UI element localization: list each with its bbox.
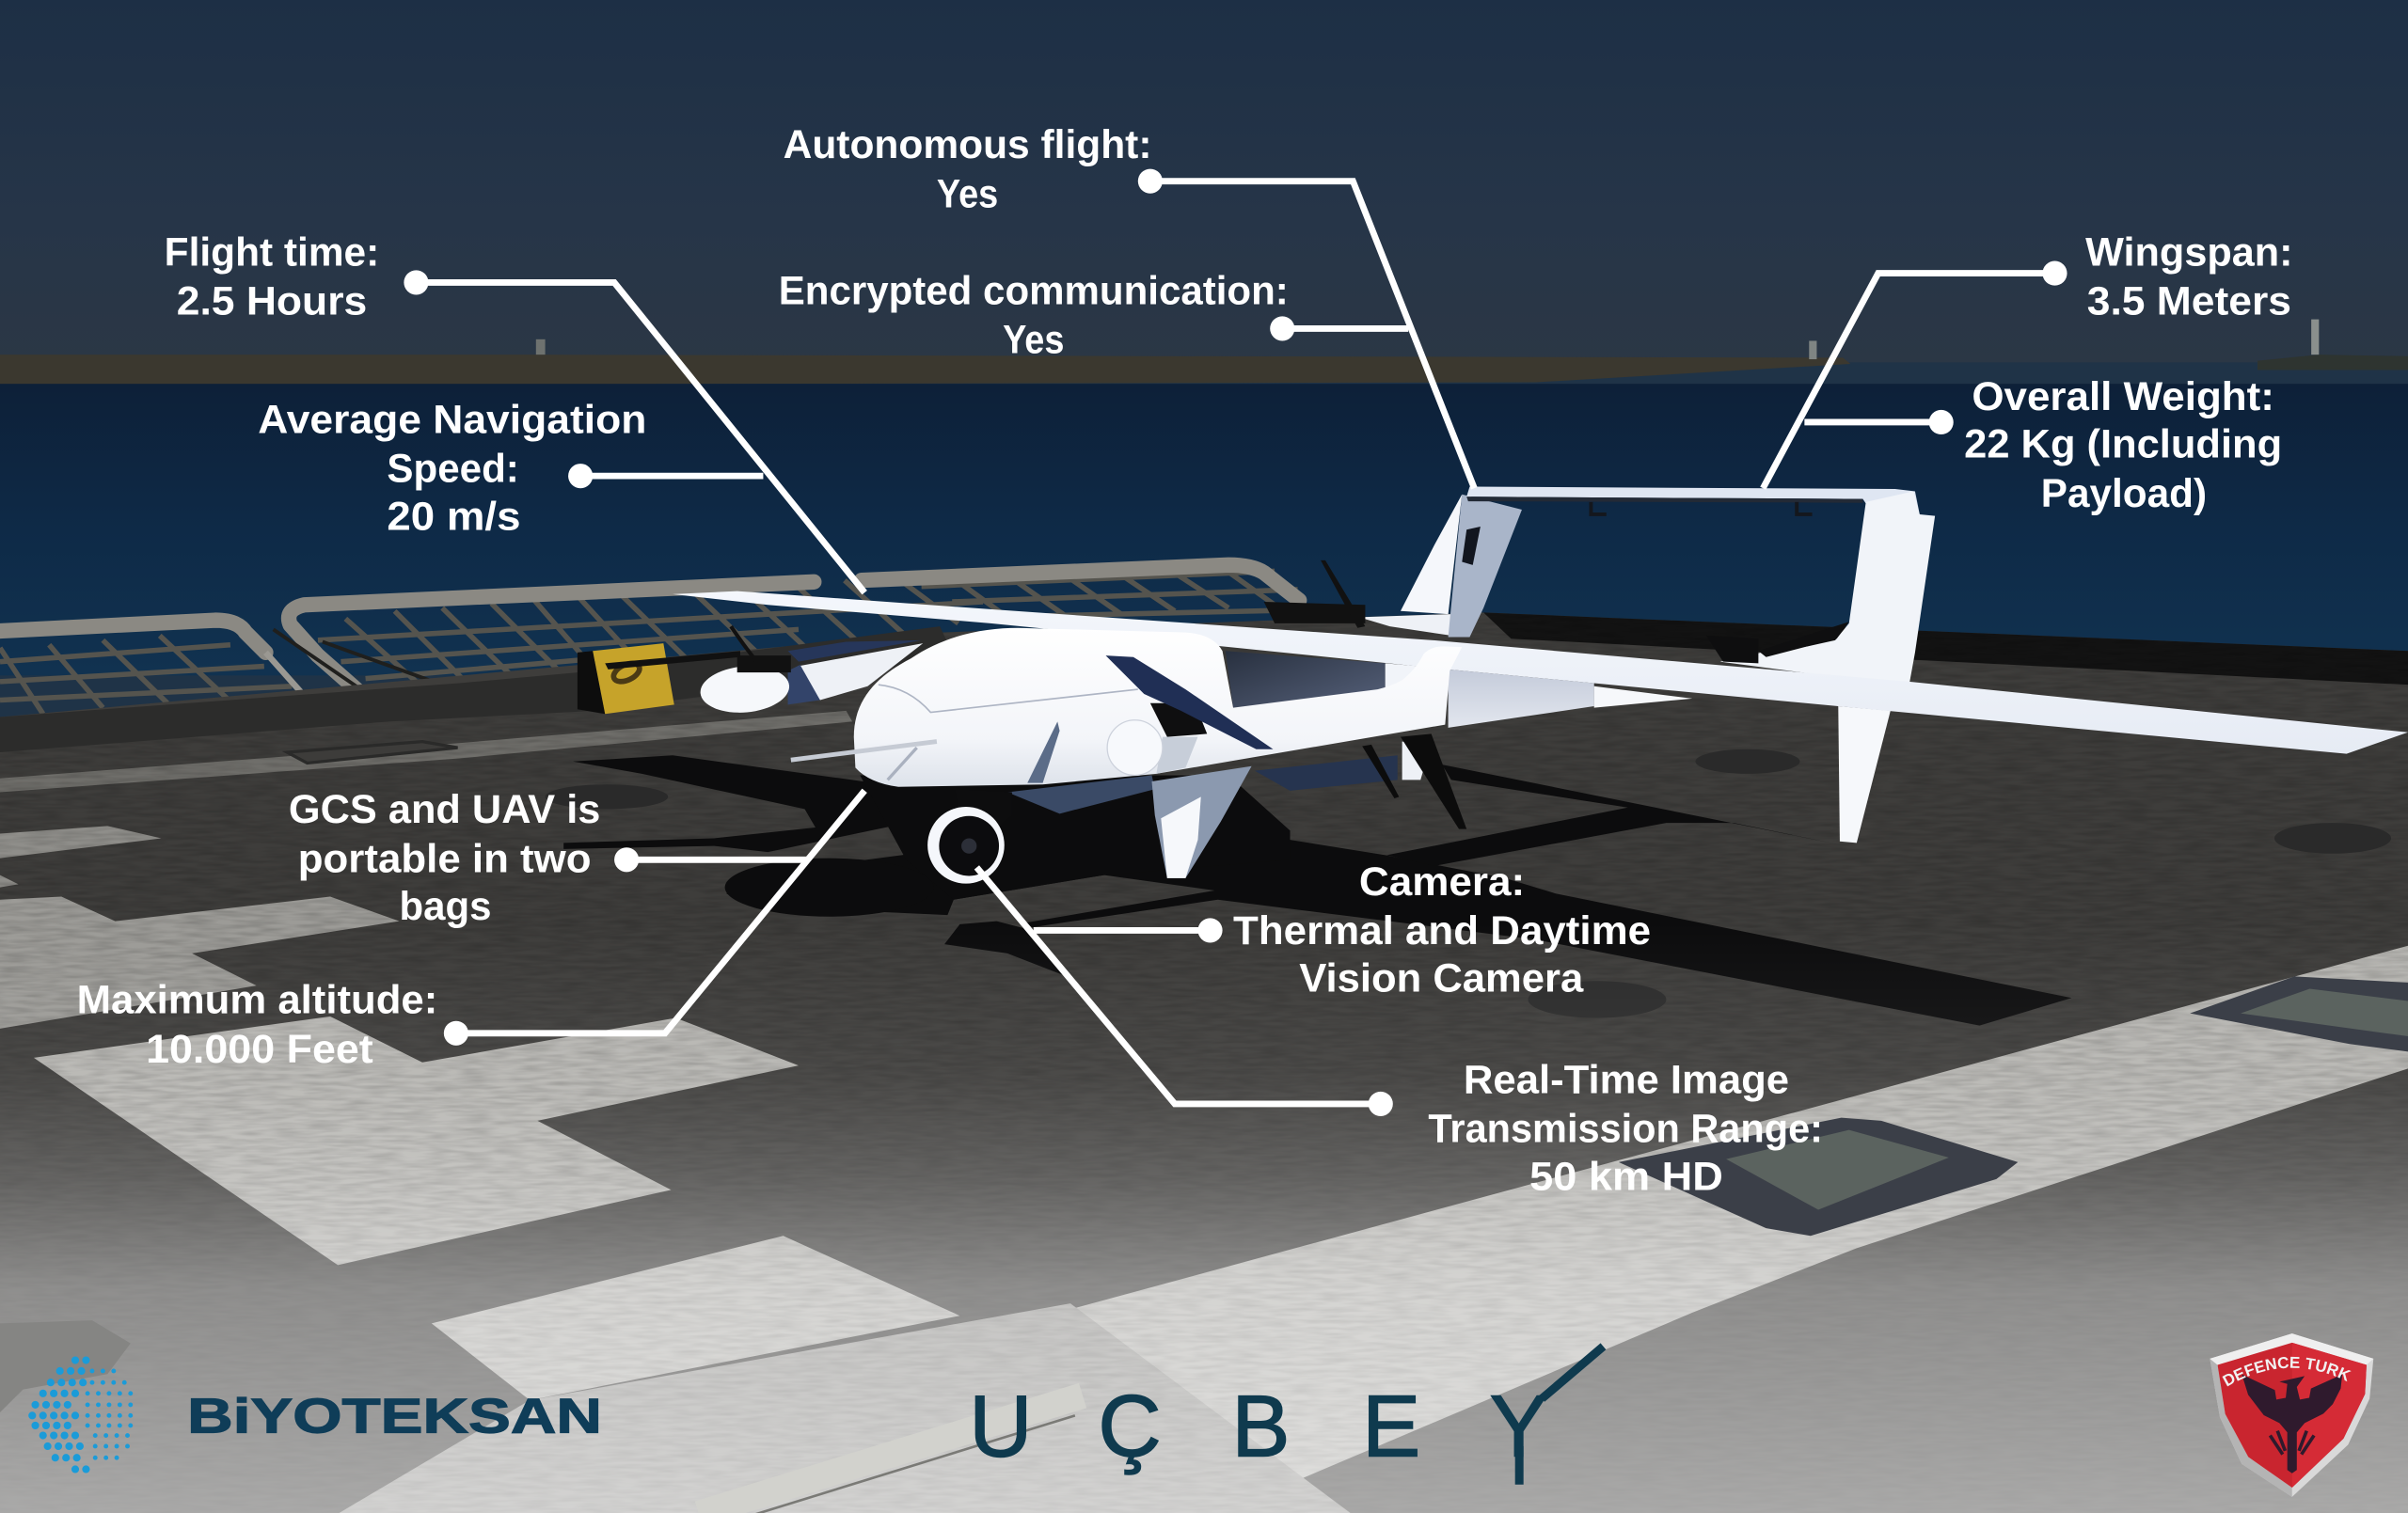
- breakwater on the horizon: [0, 320, 2408, 386]
- label: [258, 397, 646, 538]
- leader line: [976, 867, 1393, 1116]
- light fade over lower deck: [0, 922, 2408, 1513]
- callout: camera: [1034, 859, 1651, 1001]
- logo: UÇBEY: [969, 1347, 1603, 1485]
- label: GCS and UAV is: [289, 787, 600, 831]
- round deck vents: [546, 749, 2391, 1017]
- label: Camera:: [1359, 859, 1525, 904]
- label: Speed:: [387, 447, 519, 491]
- top crossbar: [1466, 487, 1920, 514]
- Y tail strokes: [1519, 1347, 1603, 1485]
- flight deck surface: [0, 612, 2408, 1513]
- front rotor blade: [1106, 655, 1273, 749]
- callout: wingspan: [1763, 229, 2293, 488]
- label: [779, 268, 1289, 362]
- fuselage underside shade: [1007, 776, 1155, 813]
- wordmark: BiYOTEKSAN: [187, 1389, 602, 1443]
- callout: maximum altitude: [77, 791, 864, 1071]
- leader line: [614, 847, 808, 872]
- deck hatch on walkway: [287, 742, 458, 763]
- motor pylon: [1156, 737, 1197, 774]
- bottom-left vent: [0, 1320, 131, 1412]
- shield text: [2226, 1368, 2359, 1388]
- label: 3.5 Meters: [2087, 279, 2291, 323]
- label: Yes: [1003, 318, 1064, 362]
- shield face: [2218, 1343, 2367, 1488]
- deck texture: [0, 614, 2408, 1513]
- label: Payload): [2041, 471, 2207, 515]
- callout: overall weight: [1804, 374, 2282, 515]
- side stripe: [1027, 721, 1060, 783]
- leader line: [1034, 918, 1223, 942]
- label: [77, 978, 437, 1071]
- label: Yes: [937, 171, 998, 215]
- sky: [0, 0, 2408, 362]
- leader line: [568, 464, 763, 488]
- pitot probe: [791, 742, 937, 780]
- label: Maximum altitude:: [77, 978, 437, 1022]
- right tail fin and boom: [1706, 491, 1935, 843]
- label: [1233, 859, 1651, 1001]
- callout: image transmission range: [976, 867, 1823, 1198]
- leader line: [1804, 410, 1954, 434]
- drone: [605, 487, 2408, 884]
- logo: Defence Turk shield: [2210, 1333, 2374, 1497]
- front motor: [1150, 703, 1207, 737]
- callout: encrypted communication: [779, 268, 1408, 362]
- label: [2085, 229, 2293, 323]
- callout: portability: [289, 787, 808, 928]
- label: bags: [399, 884, 491, 928]
- label: Transmission Range:: [1428, 1107, 1823, 1151]
- label: 2.5 Hours: [177, 279, 367, 323]
- label: Overall Weight:: [1972, 374, 2274, 418]
- label: [784, 122, 1151, 215]
- leader line: [444, 791, 864, 1046]
- leader line: [1763, 261, 2067, 488]
- leader line: [1138, 169, 1474, 488]
- label: 10.000 Feet: [146, 1027, 373, 1071]
- phoenix emblem: [2242, 1375, 2342, 1474]
- label: Thermal and Daytime: [1233, 908, 1651, 953]
- leader line: [1270, 316, 1408, 340]
- callout: autonomous flight: [784, 122, 1474, 488]
- logo: Defence Turk shield: DEFENCE TURK: [2222, 1356, 2352, 1386]
- fuselage and boom: [854, 628, 1462, 787]
- shield bevel: [2210, 1333, 2373, 1497]
- label: 20 m/s: [387, 494, 520, 538]
- label: [1428, 1057, 1823, 1198]
- rear boom and left tail fin: [1359, 495, 1522, 638]
- label: Encrypted communication:: [779, 268, 1289, 312]
- rear lower fin and rotor blades: [1255, 733, 1466, 829]
- drone shadow on the deck: [563, 755, 2071, 1026]
- label: [1964, 374, 2282, 515]
- label: Average Navigation: [258, 397, 646, 441]
- label: 50 km HD: [1529, 1154, 1723, 1198]
- label: Autonomous flight:: [784, 122, 1151, 166]
- gimbal camera: [927, 807, 1005, 884]
- label: Wingspan:: [2085, 229, 2293, 274]
- safety net railings: [0, 565, 1321, 714]
- yellow warning sign: [578, 643, 674, 714]
- far wall on the right: [1483, 612, 2408, 685]
- main wing: [673, 591, 2408, 754]
- bulwark wall: [0, 626, 952, 752]
- callout: flight time: [165, 229, 864, 592]
- far motor and upper rotor blade: [1264, 560, 1365, 628]
- label: Flight time:: [165, 229, 379, 274]
- label: Vision Camera: [1299, 956, 1584, 1001]
- motor pod: [1107, 720, 1163, 776]
- wordmark: UÇBEY: [969, 1378, 1548, 1475]
- logo: Biyoteksan: [32, 1361, 602, 1469]
- deck hatches: [1619, 976, 2408, 1236]
- label: Real-Time Image: [1464, 1057, 1789, 1101]
- label: [289, 787, 600, 928]
- front lower fin: [1151, 766, 1252, 878]
- leader line: [404, 270, 864, 592]
- icon: dotted sphere: [32, 1361, 141, 1469]
- camera strut: [956, 789, 1012, 830]
- callout: average navigation speed: [258, 397, 763, 538]
- pipe on the concrete plate: [699, 1395, 1083, 1513]
- rear fuselage section: [1386, 663, 1692, 728]
- canopy seam: [879, 685, 1138, 713]
- shaded fuselage bay: [1226, 651, 1386, 708]
- label: [165, 229, 379, 323]
- sea: [0, 384, 2408, 675]
- far wing boom and motor: [605, 626, 923, 717]
- label: portable in two: [298, 836, 592, 880]
- label: 22 Kg (Including: [1964, 422, 2282, 466]
- deck markings: [0, 711, 2408, 1513]
